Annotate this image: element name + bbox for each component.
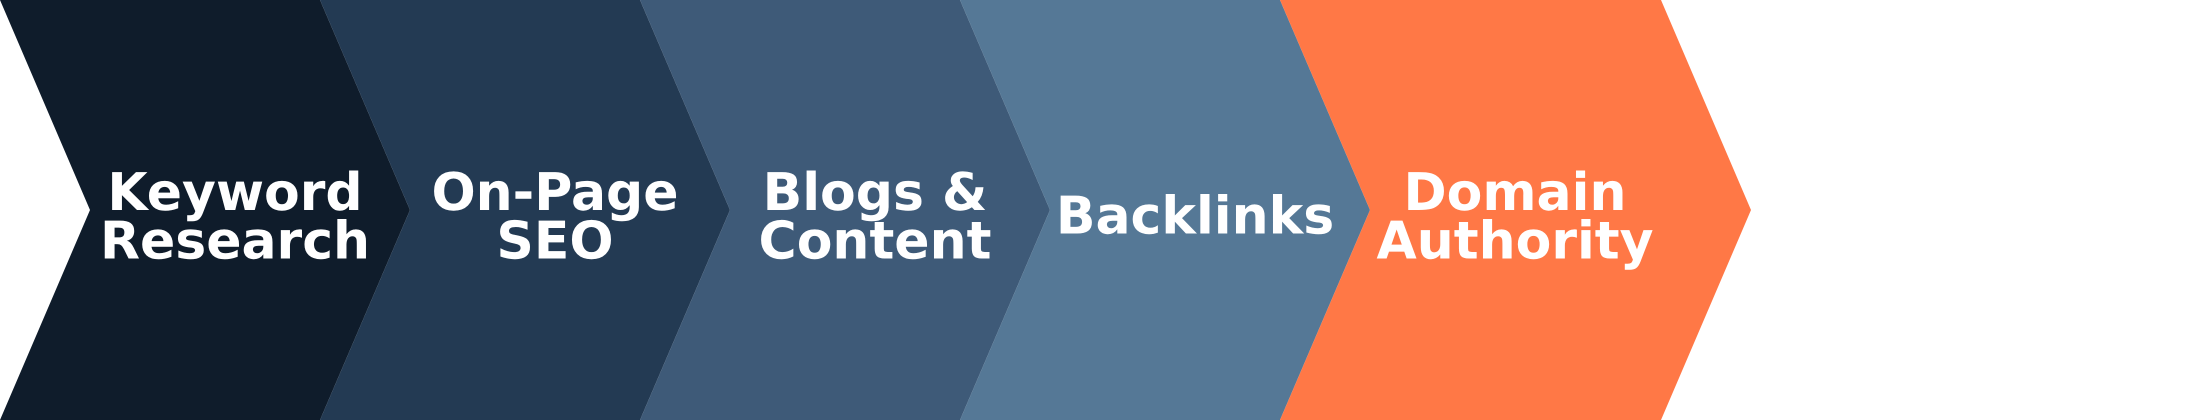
chevron step 1: Keyword Research [0,0,410,420]
chevron step 2: On-Page SEO: SEO [496,212,614,272]
chevron step 5: Domain Authority: Domain [1403,163,1627,223]
chevron step 3: Blogs & Content: Blogs & [763,163,987,223]
chevron step 2: On-Page SEO: On-Page [431,163,679,223]
chevron step 3: Blogs & Content: Content [759,212,991,272]
chevron step 1: Keyword Research: Research [100,212,370,272]
chevron step 3: Blogs & Content [640,0,1050,420]
chevron step 1: Keyword Research: Keyword [107,163,363,223]
chevron step 5: Domain Authority [1280,0,1751,420]
chevron step 4: Backlinks [960,0,1370,420]
chevron step 2: On-Page SEO [320,0,730,420]
chevron step 4: Backlinks: Backlinks [1056,186,1334,246]
chevron step 5: Domain Authority: Authority [1376,212,1654,272]
